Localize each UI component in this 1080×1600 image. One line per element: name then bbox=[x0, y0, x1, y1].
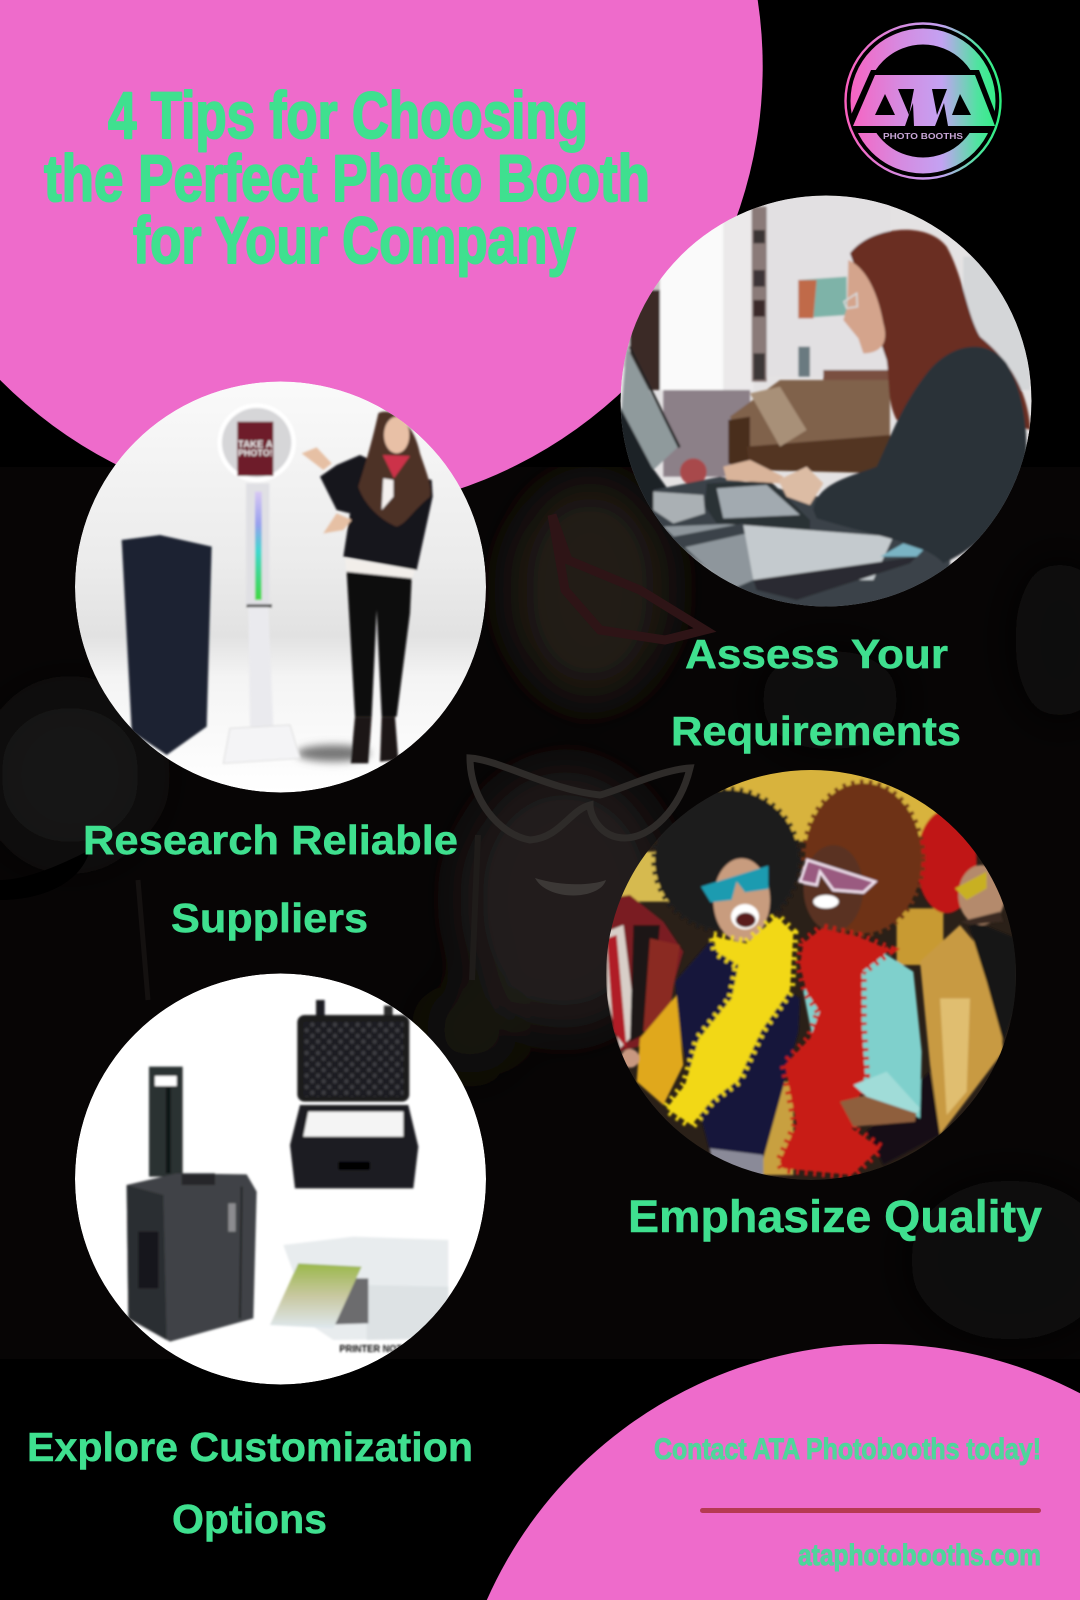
bottom pink circle bbox=[487, 1344, 1080, 1600]
label: assess your requirements bbox=[671, 631, 961, 754]
label: research reliable suppliers: Research Reliable bbox=[83, 817, 458, 863]
yellow boa bbox=[667, 917, 793, 1125]
label: explore customization options: Options bbox=[172, 1496, 327, 1542]
divider line bbox=[700, 1508, 1041, 1513]
label: emphasize quality: Emphasize Quality bbox=[628, 1191, 1042, 1242]
photo circle: emphasize quality, party guests bbox=[606, 765, 1017, 1182]
label: explore customization options bbox=[27, 1424, 473, 1542]
booth pole bbox=[246, 483, 269, 605]
title bbox=[44, 78, 650, 277]
photo circle: research reliable suppliers, booth and woman bbox=[75, 382, 486, 792]
carry bag bbox=[122, 535, 212, 755]
top pink circle bbox=[0, 0, 763, 512]
red boa bbox=[780, 928, 890, 1175]
photo circle: explore customization options, cases and printer bbox=[75, 974, 486, 1384]
logo: ATA Photo Booths: PHOTO BOOTHS bbox=[883, 132, 964, 141]
label: assess your requirements: Assess Your bbox=[685, 631, 948, 677]
photo circle: research reliable suppliers, booth and woman: PHOTO! bbox=[238, 448, 273, 458]
label: assess your requirements: Requirements bbox=[671, 708, 961, 754]
photo circle: assess your requirements, woman at computer bbox=[617, 190, 1032, 623]
woman bbox=[320, 455, 433, 570]
photo circle: explore customization options, cases and printer: PRINTER NOT INCLUDED bbox=[339, 1344, 453, 1355]
background photo: darkened party guests bbox=[0, 467, 1080, 1359]
booth shadow bbox=[297, 745, 370, 762]
rolling case handle bbox=[149, 1067, 183, 1177]
label: research reliable suppliers bbox=[83, 817, 458, 941]
rolling case bbox=[127, 1173, 257, 1342]
photo circle: research reliable suppliers, booth and woman: TAKE A bbox=[238, 439, 273, 450]
logo: ATA Photo Booths bbox=[843, 24, 1003, 178]
label: research reliable suppliers: Suppliers bbox=[171, 895, 368, 941]
title: the Perfect Photo Booth bbox=[44, 141, 650, 215]
title: for Your Company bbox=[133, 203, 576, 277]
printer bbox=[283, 1237, 448, 1340]
open case bbox=[316, 1000, 325, 1017]
title: 4 Tips for Choosing bbox=[108, 78, 588, 152]
booth ring bbox=[217, 403, 296, 482]
label: explore customization options: Explore Customization bbox=[27, 1424, 473, 1470]
